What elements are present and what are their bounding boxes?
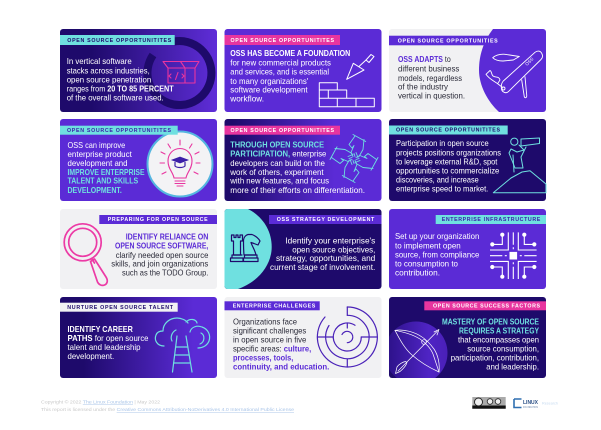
text block: significant challenges: [233, 327, 306, 336]
icon: cloud and ladder: [155, 318, 210, 372]
footer: copyright and license: This report is licensed under the Creative Commons Attribution-NoDerivatives 4.0 International Public License: [41, 407, 294, 412]
text block: [229, 49, 350, 104]
icon: circuit: [490, 232, 537, 279]
panel: enterprise challenges: [224, 297, 382, 378]
logo: Linux Foundation Research: [514, 399, 558, 409]
panel heading: [436, 215, 546, 224]
text block: [396, 139, 501, 193]
icon: light bulb with graduation cap: [148, 132, 212, 196]
panel heading: OPEN SOURCE OPPORTUNITITES: [230, 38, 334, 44]
panel heading: OPEN SOURCE OPPORTUNITIES: [398, 38, 498, 44]
text block: [68, 325, 149, 361]
text block: OPEN SOURCE SOFTWARE,: [115, 242, 208, 251]
text block: strategy, opportunities, and: [276, 254, 376, 263]
panel: talent and skills: [60, 119, 217, 201]
panel: participation: [224, 119, 382, 201]
panel heading: [224, 301, 320, 310]
text block: PARTICIPATION, enterprise: [230, 150, 327, 159]
text block: to leverage external R&D, spot: [396, 158, 498, 167]
panel: enterprise infrastructure: [389, 209, 546, 289]
icon: circular maze: [317, 307, 377, 367]
text block: of the industry: [398, 83, 449, 92]
text block: models, regardless: [398, 74, 462, 83]
text block: Organizations face: [233, 317, 297, 326]
text block: OSS HAS BECOME A FOUNDATION: [230, 49, 350, 58]
text block: talent and leadership: [68, 343, 141, 352]
panel: strategy development: [224, 209, 382, 289]
panel heading: [60, 303, 178, 312]
panel heading: OPEN SOURCE OPPORTUNITITES: [67, 38, 172, 44]
text block: source consumption,: [467, 344, 539, 353]
icon label: OSS: [524, 56, 534, 67]
panel: OSS adapts: [389, 29, 546, 112]
text block: clarify needed open source: [116, 251, 209, 260]
text block: enterprise speed to market.: [396, 184, 488, 193]
text block: OSS can improve: [68, 141, 126, 150]
footer: copyright and license: [41, 398, 294, 412]
text block: continuity, and education.: [233, 363, 329, 372]
panel heading: [60, 126, 178, 135]
text block: open source penetration: [67, 76, 152, 85]
text block: MASTERY OF OPEN SOURCE: [442, 317, 539, 326]
text block: for new commercial products: [230, 59, 331, 68]
icon: bow and arrow: [395, 330, 439, 374]
text block: enterprise product: [68, 150, 132, 159]
icon: trowel and bricks: [319, 54, 374, 107]
panel heading: OPEN SOURCE OPPORTUNITITES: [230, 128, 334, 134]
panel: nurture talent: [60, 297, 217, 378]
text block: OSS ADAPTS to: [398, 55, 451, 64]
panel heading: [269, 215, 382, 224]
text block: DEVELOPMENT.: [68, 186, 122, 195]
text block: IDENTIFY CAREER: [68, 325, 133, 334]
text block: to implement open: [395, 241, 461, 250]
text block: [67, 57, 174, 102]
text block: specific areas: culture,: [233, 344, 311, 353]
text block: [229, 140, 365, 195]
panel: external R&D: [389, 119, 546, 201]
text block: ranges from 20 TO 85 PERCENT: [67, 84, 174, 93]
text block: PATHS for open source: [68, 334, 149, 343]
text block: with new features, and focus: [229, 177, 329, 186]
text block: [398, 55, 465, 100]
text block: skills, and join organizations: [111, 260, 208, 269]
text block: development.: [68, 352, 114, 361]
text block: TALENT AND SKILLS: [68, 177, 139, 186]
text block: software development: [230, 85, 308, 94]
text block: open source objectives,: [292, 246, 375, 255]
text block: discoveries, and increase: [396, 175, 479, 184]
icon: pocket knife: [486, 51, 543, 98]
panel: software penetration: [60, 29, 217, 112]
panel heading: OPEN SOURCE SUCCESS FACTORS: [433, 304, 540, 310]
icon: stacked hands: [330, 134, 378, 182]
text block: contribution.: [395, 268, 440, 277]
panel heading: [60, 35, 175, 45]
footer: copyright and license: Copyright © 2022 The Linux Foundation | May 2022: [41, 398, 160, 404]
text block: [270, 236, 376, 272]
text block: such as the TODO Group.: [122, 269, 208, 278]
text block: and leadership.: [486, 363, 539, 372]
panel heading: NURTURE OPEN SOURCE TALENT: [67, 305, 174, 311]
panel heading: [224, 126, 340, 135]
text block: development and: [68, 159, 128, 168]
text block: more of their efforts on differentiation.: [230, 186, 365, 195]
icon: person with telescope on mountain: [493, 138, 546, 193]
panel heading: [389, 36, 546, 45]
text block: In vertical software: [67, 57, 132, 66]
text block: Set up your organization: [395, 232, 480, 241]
panel heading: [224, 35, 340, 45]
text block: participation, contribution,: [451, 354, 539, 363]
text block: [395, 232, 480, 277]
panel heading: OPEN SOURCE OPPORTUNITITES: [396, 128, 500, 134]
text block: IMPROVE ENTERPRISE: [68, 168, 145, 177]
text block: projects positions organizations: [396, 148, 501, 157]
panel heading: OPEN SOURCE OPPORTUNITITES: [67, 128, 171, 134]
text block: workflow.: [229, 95, 264, 104]
text block: vertical in question.: [398, 91, 465, 100]
panel heading: ENTERPRISE INFRASTRUCTURE: [442, 217, 541, 223]
text block: to consumption to: [395, 259, 458, 268]
text block: Participation in open source: [396, 139, 489, 148]
icon: chess pieces: [230, 234, 260, 262]
text block: developers can build on the: [230, 159, 325, 168]
text block: REQUIRES A STRATEGY: [459, 327, 539, 336]
text block: [442, 317, 539, 372]
panel heading: OSS STRATEGY DEVELOPMENT: [277, 217, 375, 223]
text block: stacks across industries,: [67, 66, 150, 75]
badge: Creative Commons license: [472, 397, 506, 409]
icon: open code box: [163, 62, 199, 83]
logo: Linux Foundation Research: Research: [542, 400, 558, 406]
text block: [68, 141, 145, 195]
text block: IDENTIFY RELIANCE ON: [126, 232, 208, 241]
text block: that encompasses open: [458, 336, 539, 345]
text block: to many organizations': [230, 77, 309, 86]
text block: opportunities to commercialize: [396, 166, 500, 175]
text block: THROUGH OPEN SOURCE: [230, 140, 324, 149]
panel heading: [389, 126, 508, 134]
panel heading: PREPARING FOR OPEN SOURCE: [108, 217, 208, 223]
chart: penetration donut: [147, 41, 211, 105]
text block: current stage of involvement.: [270, 263, 375, 272]
logo: Linux Foundation Research: FOUNDATION: [523, 406, 538, 409]
text block: [111, 232, 209, 278]
text block: in open source in five: [233, 336, 307, 345]
text block: work of others, experiment: [229, 168, 324, 177]
logo: Linux Foundation Research: LINUX: [523, 400, 539, 406]
panel heading: ENTERPRISE CHALLENGES: [233, 304, 316, 310]
text block: and services, and is essential: [230, 68, 329, 77]
panel heading: [99, 215, 217, 224]
text block: Identify your enterprise's: [285, 236, 375, 245]
text block: processes, tools,: [233, 354, 293, 363]
text block: [233, 317, 329, 372]
panel heading: [424, 301, 546, 310]
panel: OSS foundation: [224, 29, 382, 112]
text block: source, from compliance: [395, 251, 480, 260]
panel: success factors: [389, 297, 546, 378]
text block: of the overall software used.: [67, 93, 164, 102]
text block: different business: [398, 65, 459, 74]
panel: reliance on open source: [60, 209, 217, 289]
icon: magnifying glass: [64, 224, 107, 285]
